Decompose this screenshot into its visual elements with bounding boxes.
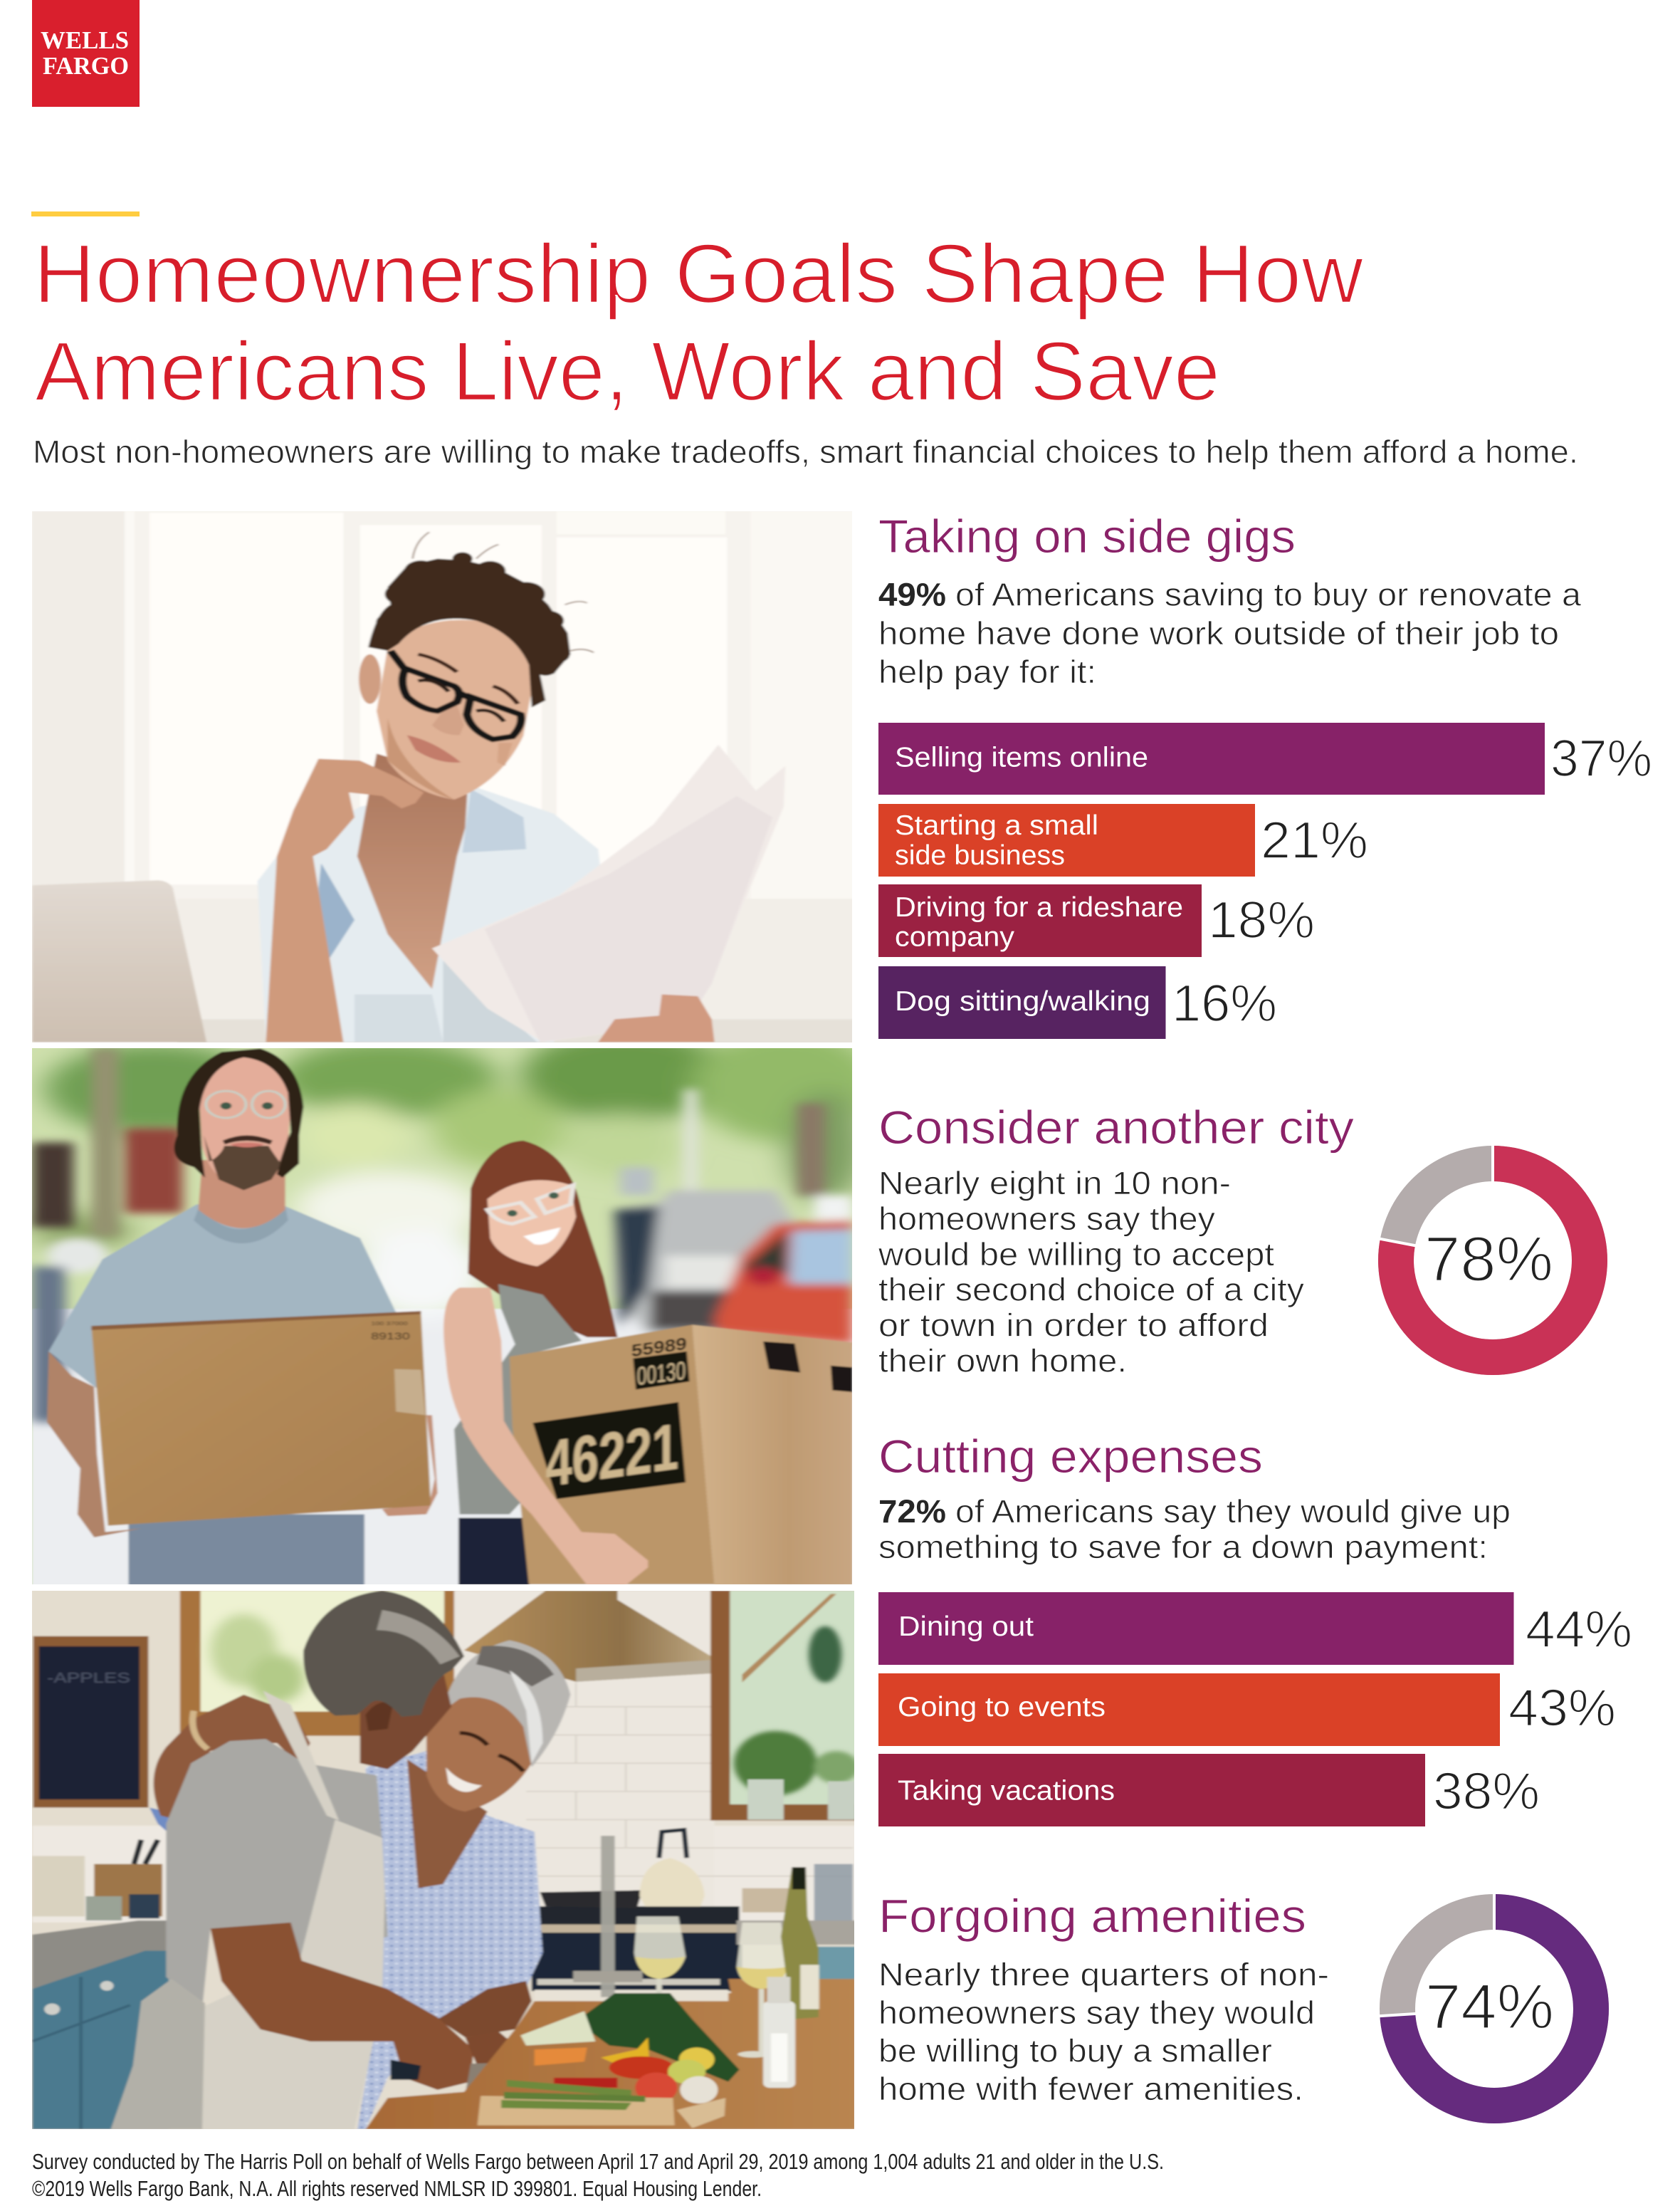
bar chart: side gigs: 18% (1208, 892, 1315, 949)
bar chart: side gigs: company (895, 921, 1015, 953)
bar chart: side gigs: Driving for a rideshare (895, 892, 1183, 923)
footnote: Survey conducted by The Harris Poll on behalf of Wells Fargo between April 17 and April 29, 2019 among 1,004 adults 21 and older in the U.S. (32, 2149, 1164, 2174)
bar chart: expenses: Dining out (898, 1611, 1034, 1642)
donut chart: 74%: 74% (1425, 1971, 1554, 2042)
body text (878, 1165, 1305, 1379)
grey parked car (615, 1190, 794, 1334)
body text: or town in order to afford (878, 1307, 1269, 1343)
range hood (464, 1591, 725, 1682)
body text: Nearly eight in 10 non- (878, 1165, 1231, 1201)
section: cutting expenses (878, 1430, 1632, 1826)
woman (468, 1141, 617, 1337)
intro text: 49% (878, 577, 946, 612)
box held by woman (510, 1324, 715, 1584)
salt mill (763, 2001, 795, 2088)
title (33, 227, 1364, 419)
stove and kettle (535, 1925, 742, 1933)
red parked car (715, 1220, 853, 1344)
section: forgoing amenities (878, 1890, 1591, 2107)
vegetables (576, 1993, 740, 2082)
intro text: of Americans say they would give up (955, 1493, 1511, 1530)
cutting board with asparagus (478, 2096, 675, 2126)
shirt (258, 785, 604, 1042)
photo: couple carrying moving boxes (32, 1048, 852, 1584)
his arm and knife (211, 1923, 473, 2090)
heading: Taking on side gigs (878, 510, 1296, 563)
papers (432, 745, 785, 1042)
box held by man (91, 1312, 431, 1526)
right window with plants (710, 1591, 857, 1821)
her arm around him (154, 1695, 310, 1819)
her forearm and hands (438, 1981, 532, 2037)
hand on paper (598, 994, 715, 1042)
photo: couple carrying moving boxes: 89130 (371, 1330, 410, 1342)
intro text: home have done work outside of their job to (878, 615, 1559, 652)
body text: home with fewer amenities. (878, 2071, 1303, 2107)
footnote: ©2019 Wells Fargo Bank, N.A. All rights reserved NMLSR ID 399801. Equal Housing Lender. (32, 2176, 762, 2201)
photo: couple carrying moving boxes: 100 37000 (371, 1321, 408, 1327)
body text: their own home. (878, 1343, 1127, 1379)
face (377, 620, 535, 800)
logo: Wells Fargo: WELLS (41, 26, 129, 54)
bar chart: expenses (878, 1592, 1632, 1826)
footnote (32, 2149, 1164, 2201)
glasses (390, 651, 521, 739)
window behind couple (180, 1591, 457, 1736)
intro text (878, 1493, 1511, 1565)
body text: Nearly three quarters of non- (878, 1957, 1329, 1992)
photo: couple carrying moving boxes: 46221 (545, 1411, 678, 1501)
kitchen island (365, 1979, 856, 2129)
bar chart: expenses: 44% (1526, 1601, 1632, 1658)
intro text: help pay for it: (878, 654, 1096, 690)
bar chart: side gigs: 37% (1550, 730, 1652, 788)
her forearm over box (463, 1401, 648, 1585)
heading: Forgoing amenities (878, 1890, 1306, 1943)
bar chart: side gigs (878, 723, 1652, 1039)
donut chart: 74% (1376, 1890, 1591, 2106)
apron (199, 1819, 385, 2129)
tile wall (32, 1826, 857, 1923)
photo: couple cooking in kitchen: -APPLES (47, 1670, 130, 1686)
photo: couple carrying moving boxes: 55989 (631, 1334, 687, 1361)
photo: couple cooking in kitchen (0, 1574, 886, 2206)
bar chart: side gigs: Selling items online (895, 742, 1148, 773)
logo: Wells Fargo (32, 0, 140, 107)
donut chart: 78% (1376, 1141, 1590, 1357)
wine glasses (634, 1916, 686, 1979)
heading: Cutting expenses (878, 1430, 1263, 1483)
photo: couple carrying moving boxes: 00130 (637, 1356, 686, 1391)
intro text: of Americans saving to buy or renovate a (955, 577, 1582, 612)
section: consider another city (878, 1101, 1590, 1379)
intro text: something to save for a down payment: (878, 1529, 1488, 1565)
body text: their second choice of a city (878, 1272, 1305, 1307)
body text (878, 1957, 1329, 2107)
bar chart: side gigs: 21% (1261, 812, 1368, 869)
section: taking on side gigs (878, 510, 1652, 1039)
donut chart: 78%: 78% (1424, 1223, 1553, 1295)
intro text: 72% (878, 1493, 946, 1530)
bar chart: side gigs: Dog sitting/walking (895, 986, 1150, 1017)
hair (368, 553, 570, 708)
chalkboard (33, 1636, 149, 1807)
subtitle: Most non-homeowners are willing to make tradeoffs, smart financial choices to help them afford a home. (33, 434, 1578, 470)
title: Homeownership Goals Shape How (33, 227, 1364, 321)
body text: would be willing to accept (878, 1236, 1275, 1272)
bar chart: side gigs: 16% (1172, 975, 1277, 1033)
bar chart: expenses: 38% (1433, 1763, 1540, 1821)
intro text (878, 577, 1582, 690)
laptop (32, 880, 206, 1042)
woman (149, 1807, 183, 1836)
man (48, 1204, 421, 1389)
bar chart: expenses: 43% (1508, 1680, 1616, 1737)
bar chart: expenses: Taking vacations (898, 1776, 1115, 1806)
left counter and cabinets (32, 1920, 166, 1989)
bar chart: side gigs: side business (895, 840, 1065, 871)
man shirt (166, 1739, 388, 2009)
heading: Consider another city (878, 1101, 1354, 1154)
body text: homeowners say they (878, 1201, 1216, 1237)
his head (360, 1671, 451, 1769)
arm and hand (266, 759, 424, 1042)
neck and chest (357, 753, 468, 989)
wine bottle (781, 1867, 819, 2019)
bar chart: side gigs: Starting a small (895, 810, 1098, 841)
logo: Wells Fargo: FARGO (43, 52, 129, 80)
photo: woman reading papers (32, 511, 852, 1042)
blurred street background (32, 1048, 852, 1310)
title: Americans Live, Work and Save (35, 325, 1220, 419)
bar chart: expenses: Going to events (898, 1692, 1106, 1723)
body text: homeowners say they would (878, 1995, 1315, 2031)
body text: be willing to buy a smaller (878, 2032, 1272, 2069)
